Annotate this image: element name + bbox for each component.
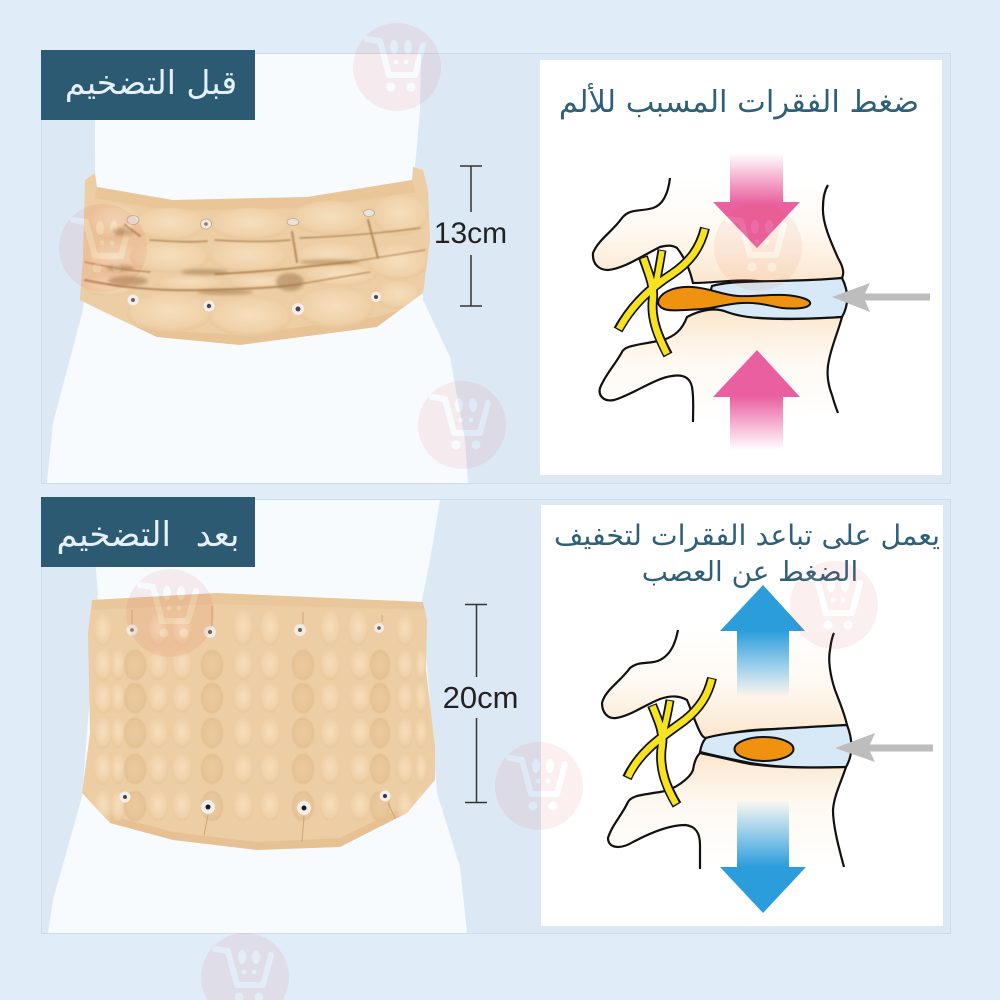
torso silhouette — [48, 500, 467, 933]
lobes — [94, 610, 427, 822]
heading: relief — [554, 519, 940, 588]
herniated nucleus — [658, 287, 810, 310]
lower vertebra — [600, 310, 842, 422]
disc — [700, 725, 851, 768]
spine diagram: relieved — [602, 585, 933, 913]
label: before inflation — [41, 50, 255, 120]
label: after inflation — [41, 497, 255, 567]
healthy nucleus — [734, 737, 794, 761]
belt inflated — [82, 593, 435, 850]
panel frame — [42, 500, 950, 934]
fold shadows — [85, 220, 425, 290]
height dimension 20cm — [443, 604, 518, 802]
height dimension 13cm — [434, 166, 507, 306]
arrow: stretch down — [720, 800, 806, 913]
eyelet studs — [120, 623, 390, 815]
row 4 — [138, 297, 202, 326]
belt deflated — [80, 167, 430, 345]
heading: relief: الضغط عن العصب — [642, 555, 858, 588]
upper vertebra — [602, 630, 847, 738]
arrow: press down — [713, 153, 800, 248]
height dimension 20cm: 20cm — [443, 680, 518, 715]
row 2 — [95, 246, 132, 266]
label: after inflation: بعد التضخيم — [57, 515, 239, 555]
arrow: grey pointer — [835, 733, 933, 762]
puffs — [84, 195, 428, 336]
row 1 — [96, 208, 132, 233]
lower vertebra — [608, 753, 846, 869]
arrow: press up — [713, 350, 800, 450]
torso silhouette — [47, 54, 468, 483]
panel: before inflation — [42, 54, 950, 484]
spine diagram: compressed — [593, 153, 930, 450]
disc — [706, 278, 847, 319]
upper vertebra — [593, 178, 843, 283]
seams — [132, 606, 396, 842]
panel frame — [42, 54, 950, 484]
top row lobes — [96, 613, 412, 640]
label: before inflation: قبل التضخيم — [65, 63, 237, 102]
eyelet studs — [127, 210, 381, 315]
lobe rows — [94, 649, 427, 681]
row 3 — [92, 278, 126, 292]
arrow: grey pointer — [832, 283, 930, 312]
nerve roots — [627, 678, 712, 805]
heading: compression: ضغط الفقرات المسبب للألم — [559, 82, 919, 120]
height dimension 13cm: 13cm — [434, 217, 507, 250]
panel: after inflation — [42, 500, 950, 934]
card: compressed vertebrae — [540, 60, 942, 475]
heading: relief: يعمل على تباعد الفقرات لتخفيف — [554, 519, 940, 552]
nerve roots — [618, 228, 705, 355]
card: decompressed vertebrae — [541, 505, 943, 926]
arrow: stretch up — [720, 585, 805, 697]
